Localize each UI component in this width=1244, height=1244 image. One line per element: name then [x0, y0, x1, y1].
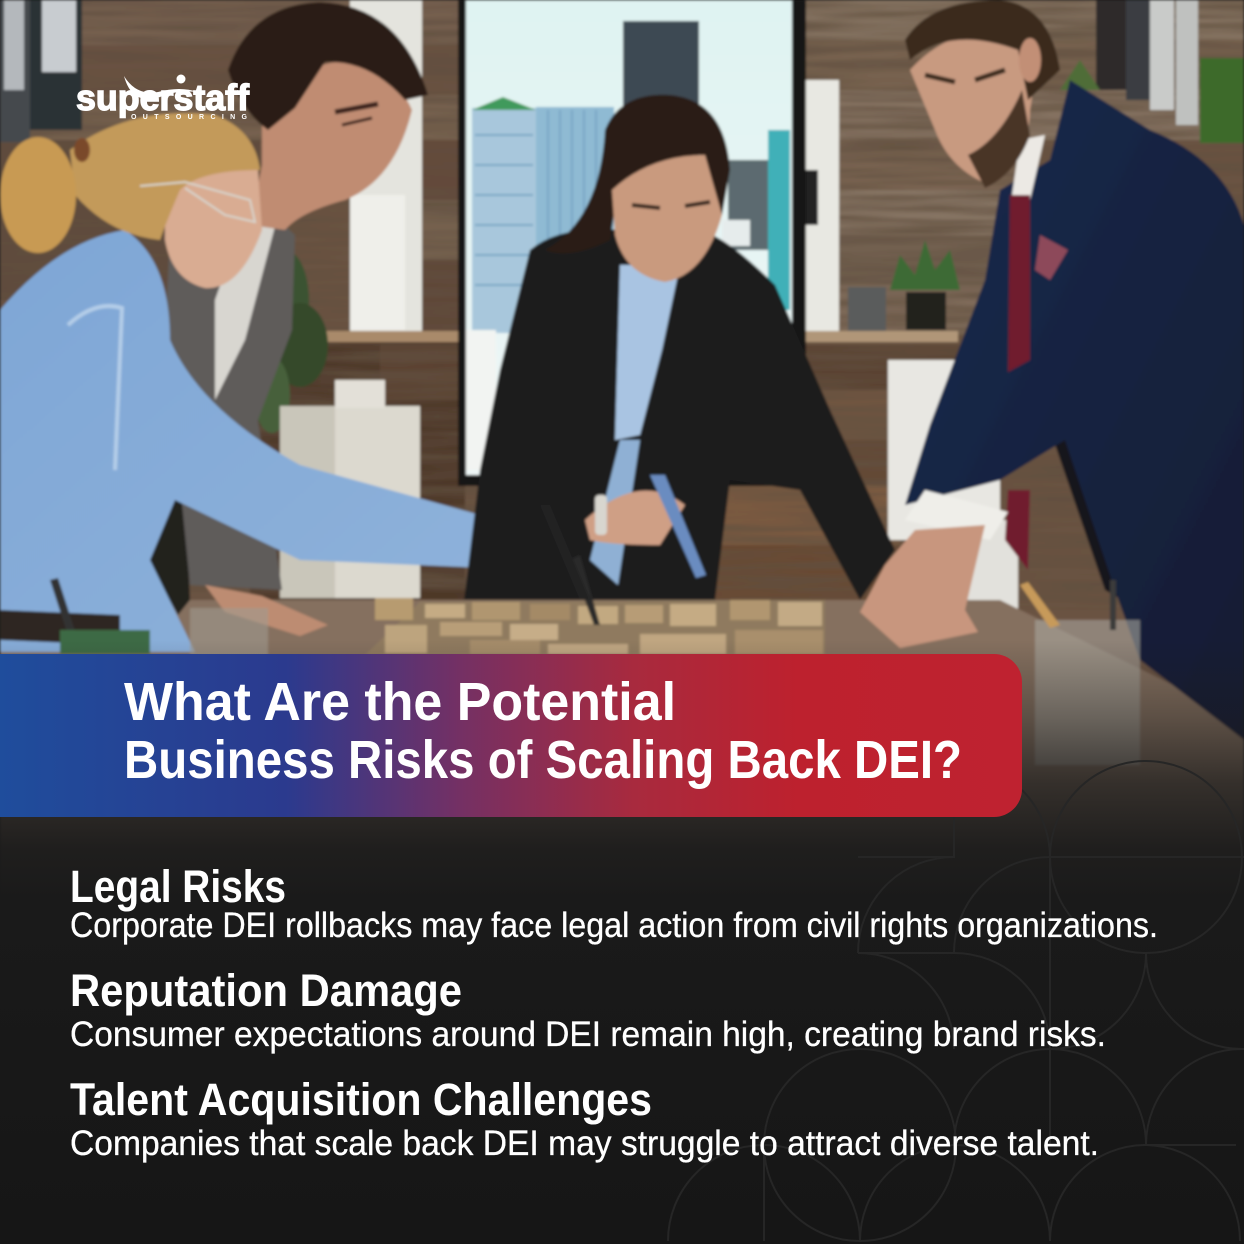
person: woman in blue shirt: [0, 113, 580, 652]
logo: superstaff outsourcing: OUTSOURCING: [131, 114, 248, 121]
wood wall background: [0, 0, 1244, 700]
bottom dark panel: [0, 900, 1244, 1244]
risk: legal risks: Corporate DEI rollbacks may face legal action from civil rights organizations.: [70, 906, 1158, 945]
logo: superstaff outsourcing: superstaff: [76, 77, 250, 118]
geometric line pattern: [668, 761, 1244, 1241]
risk: reputation damage: Reputation Damage: [70, 965, 462, 1016]
risk: talent acquisition challenges: [70, 1074, 1099, 1163]
risk: legal risks: Legal Risks: [70, 861, 286, 912]
photo: team reviewing an architectural model: [0, 0, 1244, 900]
risk: reputation damage: [70, 965, 1106, 1054]
title text: What Are the Potential: [124, 672, 676, 732]
window with city skyline: [458, 0, 818, 486]
risk: talent acquisition challenges: Talent Acquisition Challenges: [70, 1074, 652, 1125]
binders top right: [1096, 0, 1244, 143]
binders top left: [0, 0, 82, 142]
table: [0, 600, 1244, 900]
risk: legal risks: [70, 861, 1158, 945]
person: woman in black suit: [464, 95, 895, 625]
potted plants: [254, 60, 1100, 433]
risk: talent acquisition challenges: Companies that scale back DEI may struggle to attract diverse talent.: [70, 1124, 1099, 1163]
person: man in navy suit: [860, 0, 1244, 740]
person: man in grey suit: [130, 2, 428, 636]
risk: reputation damage: Consumer expectations around DEI remain high, creating brand risks.: [70, 1015, 1106, 1054]
glass pencil cup left: [50, 578, 268, 656]
glass pencil cup right: [1020, 580, 1140, 765]
title banner: [0, 654, 1022, 817]
bottom dark gradient overlay: [0, 640, 1244, 900]
white building models: [280, 360, 1018, 610]
title text: Business Risks of Scaling Back DEI?: [124, 730, 962, 790]
title text: [124, 672, 962, 790]
scale city model: [365, 598, 825, 655]
shelves and white models: [320, 0, 958, 342]
